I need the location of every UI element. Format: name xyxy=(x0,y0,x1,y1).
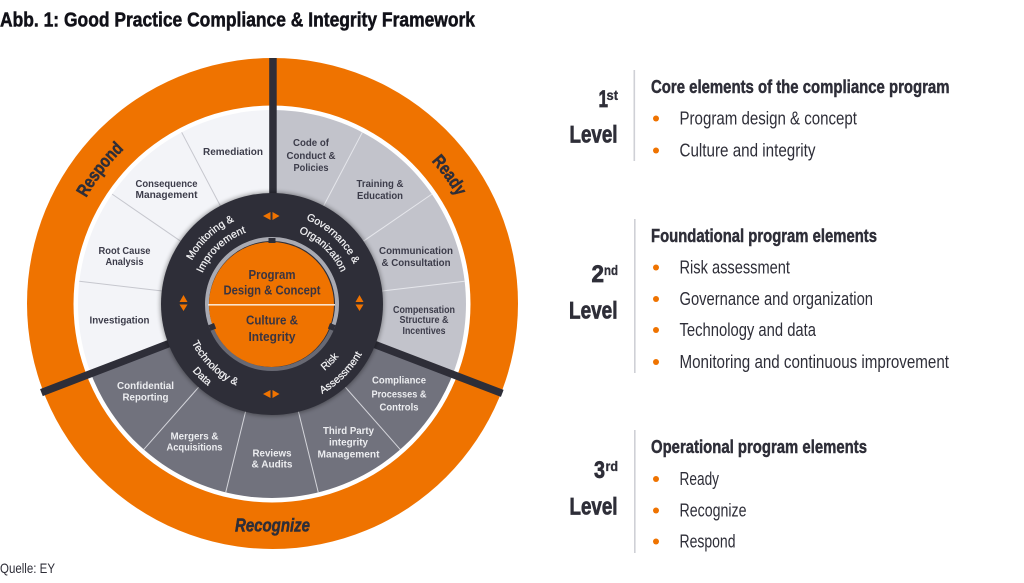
icon: left arrows xyxy=(180,295,188,311)
level badge: 2nd level: 2 xyxy=(592,261,604,288)
heading: core elements: Core elements of the compliance program xyxy=(651,77,950,97)
core divider xyxy=(208,304,335,306)
core text: program design and concept xyxy=(224,268,321,298)
heading: foundational elements: Foundational program elements xyxy=(651,226,877,246)
segment: code of conduct and policies: Conduct & xyxy=(286,151,336,162)
segment: training and education xyxy=(356,179,404,202)
level badge: 2nd level: Level xyxy=(569,298,618,324)
ring stub: right xyxy=(328,323,336,331)
ring label: monitoring and improvement: Monitoring & xyxy=(186,216,234,260)
framework wheel xyxy=(27,58,518,549)
core text: culture and integrity xyxy=(246,314,298,344)
ring label: ready: Ready xyxy=(432,154,466,195)
divider line xyxy=(634,430,636,553)
divider line xyxy=(634,219,636,373)
core text: program design and concept: Design & Concept xyxy=(224,284,321,298)
segment: code of conduct and policies: Code of xyxy=(293,138,330,149)
segment: compensation structure and incentives: Compensation xyxy=(393,305,455,316)
level badge: 2nd level: nd xyxy=(604,262,618,278)
segment: training and education: Education xyxy=(357,191,403,202)
segment: reviews and audits: & Audits xyxy=(252,460,293,470)
outer orange ring xyxy=(27,58,518,549)
segment: reviews and audits xyxy=(252,448,293,470)
white separator ring xyxy=(74,106,470,502)
heading: operational elements: Operational program elements xyxy=(651,437,867,457)
ring label: respond: Respond xyxy=(76,140,124,198)
bullet list: foundational elements: Governance and organization xyxy=(680,289,873,309)
segment: compliance processes and controls: Controls xyxy=(380,402,419,414)
ring label: risk assessment: Assessment xyxy=(320,351,362,394)
segment: compensation structure and incentives: Structure & xyxy=(400,315,448,326)
dark middle ring xyxy=(161,193,383,415)
title: Abb. 1: Good Practice Compliance & Integrity Framework xyxy=(0,10,476,32)
source note: Quelle: EY xyxy=(0,560,56,576)
segment: confidential reporting: Confidential xyxy=(117,381,174,392)
ring label: recognize: Recognize xyxy=(235,516,310,536)
level badge: 3rd level: rd xyxy=(606,458,618,474)
segment: remediation: Remediation xyxy=(203,147,263,158)
inner ring: upper grey arc xyxy=(207,239,337,327)
segment: third party integrity management: integrity xyxy=(329,438,368,448)
ring stub: left xyxy=(208,323,216,331)
segment: compliance processes and controls: Compliance xyxy=(372,376,426,386)
segment: root cause analysis: Analysis xyxy=(106,257,144,268)
sector: ready xyxy=(272,110,466,374)
segment: reviews and audits: Reviews xyxy=(252,448,292,460)
segment: compliance processes and controls xyxy=(372,376,426,414)
ring label: technology and data: Data xyxy=(192,366,210,386)
ring label: monitoring and improvement: Improvement xyxy=(196,226,246,272)
bullet list: core elements: Culture and integrity xyxy=(680,140,816,160)
segment: third party integrity management xyxy=(318,426,380,460)
segment: mergers and acquisitions xyxy=(166,432,223,454)
bullet list: operational elements xyxy=(653,469,746,552)
level badge: 2nd level xyxy=(569,261,618,324)
segment: third party integrity management: Third Party xyxy=(323,426,374,437)
bullet list: operational elements: Recognize xyxy=(680,500,746,520)
segment: communication and consultation: & Consultation xyxy=(382,258,450,269)
segment: code of conduct and policies xyxy=(286,138,336,174)
bullet list: foundational elements: Risk assessment xyxy=(680,258,790,278)
segment: mergers and acquisitions: Mergers & xyxy=(170,432,218,442)
core text: culture and integrity: Culture & xyxy=(246,314,298,328)
spoke: left divider xyxy=(40,339,173,396)
icon: top arrows xyxy=(263,212,280,220)
ring label: technology and data: Technology & xyxy=(192,339,238,386)
segment: compensation structure and incentives xyxy=(393,305,455,337)
bullet list: foundational elements: Monitoring and continuous improvement xyxy=(680,352,949,372)
bullet list: operational elements: Ready xyxy=(680,469,719,489)
segment: compensation structure and incentives: Incentives xyxy=(402,326,446,337)
level badge: 3rd level xyxy=(570,457,618,520)
segment: confidential reporting: Reporting xyxy=(122,392,168,404)
bullet list: core elements xyxy=(653,108,857,160)
icon: right arrows xyxy=(356,295,364,311)
divider line xyxy=(634,70,635,161)
ring stub: top xyxy=(268,238,276,243)
segment: communication and consultation: Communication xyxy=(379,246,453,257)
dark ring shadow xyxy=(160,192,384,416)
segment: training and education: Training & xyxy=(356,179,404,190)
inner ring: lower dark grey arc xyxy=(211,327,333,369)
level badge: 3rd level: 3 xyxy=(594,457,605,484)
level badge: 1st level: st xyxy=(606,87,618,103)
bullet list: core elements: Program design & concept xyxy=(680,108,857,128)
core text: culture and integrity: Integrity xyxy=(248,330,296,344)
level badge: 1st level xyxy=(570,86,618,148)
segment: consequence management: Management xyxy=(136,190,198,201)
segment: communication and consultation xyxy=(379,246,453,269)
segment: consequence management: Consequence xyxy=(136,179,198,190)
bullet list: operational elements: Respond xyxy=(680,532,736,552)
segment: mergers and acquisitions: Acquisitions xyxy=(166,442,223,454)
bullet list: foundational elements: Technology and data xyxy=(680,320,817,340)
panel: first level xyxy=(570,70,950,161)
segment: investigation: Investigation xyxy=(90,316,150,326)
panel: second level xyxy=(569,219,949,373)
segment: root cause analysis: Root Cause xyxy=(98,246,151,257)
segment: root cause analysis xyxy=(98,246,151,268)
ring label: governance and organization: Governance & xyxy=(307,214,360,264)
sector: recognize xyxy=(91,304,453,498)
level badge: 1st level: 1 xyxy=(598,86,608,113)
segment: code of conduct and policies: Policies xyxy=(294,163,329,174)
sector: respond xyxy=(78,110,272,374)
level badge: 3rd level: Level xyxy=(570,494,618,520)
segment: third party integrity management: Management xyxy=(318,450,380,460)
panel: third level xyxy=(570,430,867,553)
segment: compliance processes and controls: Processes & xyxy=(372,390,426,400)
bullet list: foundational elements xyxy=(653,258,949,372)
spoke: right divider xyxy=(370,340,504,397)
ring label: governance and organization: Organization xyxy=(300,227,346,272)
segment: consequence management xyxy=(136,179,198,201)
icon: bottom arrows xyxy=(263,390,280,398)
core text: program design and concept: Program xyxy=(248,268,296,282)
orange core disc xyxy=(209,242,334,367)
segment: confidential reporting xyxy=(117,381,174,404)
ring label: risk assessment: Risk xyxy=(320,352,340,370)
level badge: 1st level: Level xyxy=(570,122,618,148)
spoke: top divider xyxy=(269,58,277,198)
